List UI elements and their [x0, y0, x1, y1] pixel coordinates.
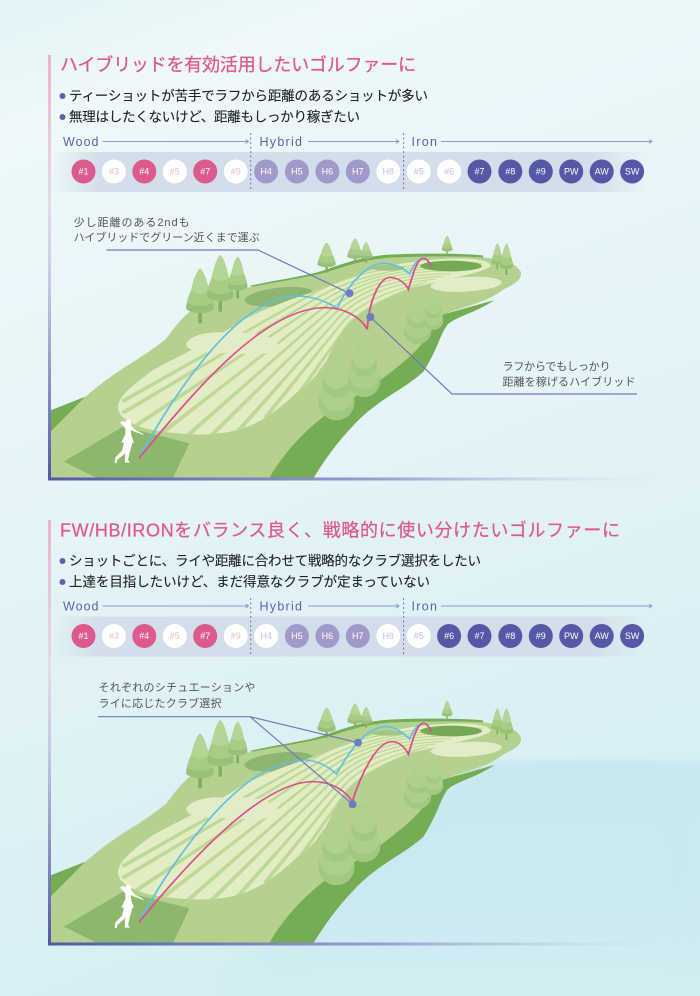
club chips: H8	[382, 166, 394, 176]
section frame	[48, 520, 658, 946]
club chips: #9	[536, 166, 546, 176]
bullet list: ショットごとに、ライや距離に合わせて戦略的なクラブ選択をしたい	[69, 552, 481, 568]
club chips: #9	[231, 631, 241, 641]
bullet list: 上達を目指したいけど、まだ得意なクラブが定まっていない	[69, 574, 430, 590]
club chips: H5	[291, 166, 303, 176]
club chips: H8	[382, 631, 394, 641]
callout: club selection: それぞれのシチュエーションや	[98, 681, 256, 694]
leader line: rough shot	[366, 313, 637, 394]
callout: rough shot: ラフからでもしっかり	[502, 360, 610, 373]
club chips: #8	[505, 631, 515, 641]
club chips: #5	[414, 166, 424, 176]
club chips: #3	[109, 631, 119, 641]
callout: rough shot	[502, 360, 636, 388]
golf course illustration	[50, 701, 526, 945]
section frame	[48, 55, 658, 480]
club category header	[63, 600, 652, 614]
club chips: AW	[595, 631, 609, 641]
golfer silhouette	[115, 419, 144, 463]
club chips: #9	[231, 166, 241, 176]
club chips: #5	[170, 166, 180, 176]
club category header: Wood	[63, 600, 99, 614]
leader line: 2nd shot	[106, 250, 354, 297]
club chips: #7	[200, 166, 210, 176]
heading: ハイブリッドを有効活用したいゴルファーに	[60, 54, 416, 75]
club category header: Hybrid	[260, 600, 302, 614]
club chips: SW	[625, 631, 640, 641]
club chips	[72, 624, 644, 648]
club chips: #4	[139, 631, 149, 641]
heading: FW/HB/IRONをバランス良く、戦略的に使い分けたいゴルファーに	[60, 520, 620, 540]
club category header	[63, 135, 652, 149]
club chips: AW	[595, 166, 609, 176]
club chips	[72, 160, 644, 184]
club chips: #5	[414, 631, 424, 641]
club chips: #4	[139, 166, 149, 176]
club category header: Iron	[412, 135, 437, 149]
club chips: #9	[536, 631, 546, 641]
bullet list: 無理はしたくないけど、距離もしっかり稼ぎたい	[69, 110, 360, 124]
leader lines: club selection	[98, 717, 362, 808]
club category header: Hybrid	[260, 135, 302, 149]
club chips: H4	[260, 166, 272, 176]
club chips: #1	[78, 631, 89, 641]
club chips: PW	[564, 631, 579, 641]
bullet list	[60, 88, 428, 124]
club band	[52, 598, 648, 656]
callout: rough shot: 距離を稼げるハイブリッド	[502, 374, 636, 388]
callout: 2nd shot: 少し距離のある2ndも	[74, 215, 190, 229]
club band	[52, 133, 648, 192]
callout: 2nd shot: ハイブリッドでグリーン近くまで運ぶ	[74, 230, 260, 244]
shot trajectories	[139, 258, 431, 458]
club chips: #7	[474, 166, 485, 176]
club chips: #7	[200, 631, 210, 641]
club chips: #5	[170, 631, 180, 641]
golf course illustration	[50, 236, 526, 480]
golfer silhouette	[115, 884, 144, 928]
club chips: H7	[352, 631, 364, 641]
callout: club selection	[98, 681, 256, 710]
bullet list: ティーショットが苦手でラフから距離のあるショットが多い	[69, 88, 428, 104]
panel: hybrid golfer	[48, 54, 658, 480]
club chips: H6	[322, 166, 333, 176]
club chips: H6	[322, 631, 333, 641]
callout: 2nd shot	[74, 215, 260, 244]
club category header: Iron	[412, 600, 437, 614]
callout: club selection: ライに応じたクラブ選択	[98, 696, 222, 710]
shot trajectories	[139, 723, 431, 922]
panel: balanced golfer	[48, 520, 658, 946]
bullet list	[60, 552, 481, 590]
club chips: PW	[564, 166, 579, 176]
club chips: SW	[625, 166, 640, 176]
club chips: H7	[352, 166, 364, 176]
club category header: Wood	[63, 135, 99, 149]
club chips: #7	[474, 631, 485, 641]
club chips: H4	[260, 631, 272, 641]
club chips: H5	[291, 631, 303, 641]
club chips: #6	[444, 166, 454, 176]
club chips: #3	[109, 166, 119, 176]
club chips: #6	[444, 631, 454, 641]
club chips: #8	[505, 166, 515, 176]
club chips: #1	[78, 166, 89, 176]
